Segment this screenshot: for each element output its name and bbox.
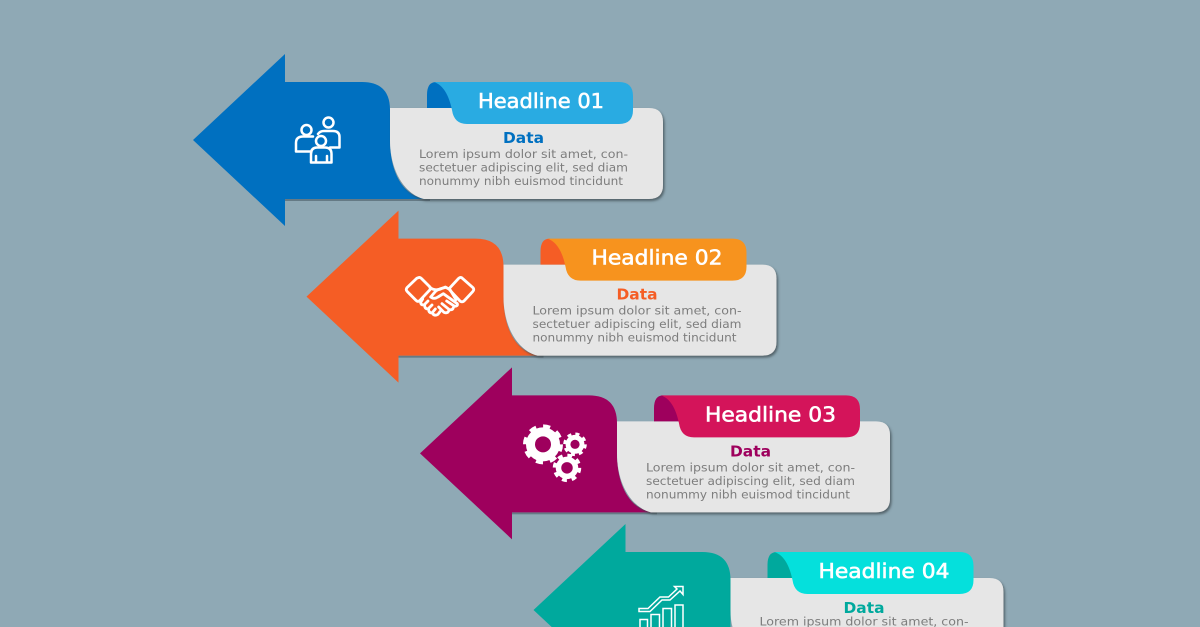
- data label 1: Data: [503, 129, 544, 147]
- headline tab 3: [661, 395, 860, 437]
- data label 3: Data: [730, 442, 771, 460]
- body text 2: [532, 304, 742, 345]
- tab fold 3: [654, 395, 680, 421]
- headline 3: Headline 03: [705, 402, 836, 426]
- headline 4: Headline 04: [818, 559, 950, 583]
- icon: people: [296, 118, 340, 162]
- body text 1: Lorem ipsum dolor sit amet, con-: [419, 147, 628, 161]
- panel 1: [390, 108, 663, 199]
- icon: handshake: [406, 277, 474, 315]
- arrow 1: [193, 54, 430, 226]
- body text 1: sectetuer adipiscing elit, sed diam: [419, 160, 628, 174]
- arrow 2: [306, 211, 544, 383]
- data label 2: Data: [616, 286, 658, 304]
- panel 2: [504, 265, 776, 356]
- body text 1: [419, 147, 628, 188]
- row 2: partnership: [306, 211, 776, 383]
- arrow 4: [534, 524, 730, 627]
- body text 2: Lorem ipsum dolor sit amet, con-: [532, 304, 742, 318]
- data label 4: Data: [844, 599, 884, 617]
- body text 3: Lorem ipsum dolor sit amet, con-: [646, 460, 855, 474]
- body text 1: nonummy nibh euismod tincidunt: [419, 174, 624, 188]
- body text 3: [646, 460, 855, 501]
- headline tab 4: [774, 552, 974, 594]
- headline 2: Headline 02: [592, 246, 722, 270]
- icon: growth chart: [639, 586, 683, 627]
- headline 1: Headline 01: [478, 89, 604, 113]
- row 1: team: [193, 54, 663, 226]
- panel 4: [730, 578, 1004, 627]
- panel 3: [617, 421, 890, 512]
- tab fold 1: [427, 82, 453, 108]
- arrow 3: [420, 367, 657, 539]
- tab fold 2: [540, 239, 566, 265]
- headline tab 1: [434, 82, 633, 124]
- tab fold 4: [768, 552, 794, 578]
- body text 3: sectetuer adipiscing elit, sed diam: [646, 474, 855, 488]
- row 4: growth: [534, 524, 1004, 627]
- body text 2: nonummy nibh euismod tincidunt: [532, 331, 737, 345]
- icon: gears: [526, 427, 585, 480]
- body text 3: nonummy nibh euismod tincidunt: [646, 487, 851, 501]
- row 3: settings: [420, 367, 890, 539]
- body text 2: sectetuer adipiscing elit, sed diam: [532, 317, 742, 331]
- headline tab 2: [548, 239, 746, 281]
